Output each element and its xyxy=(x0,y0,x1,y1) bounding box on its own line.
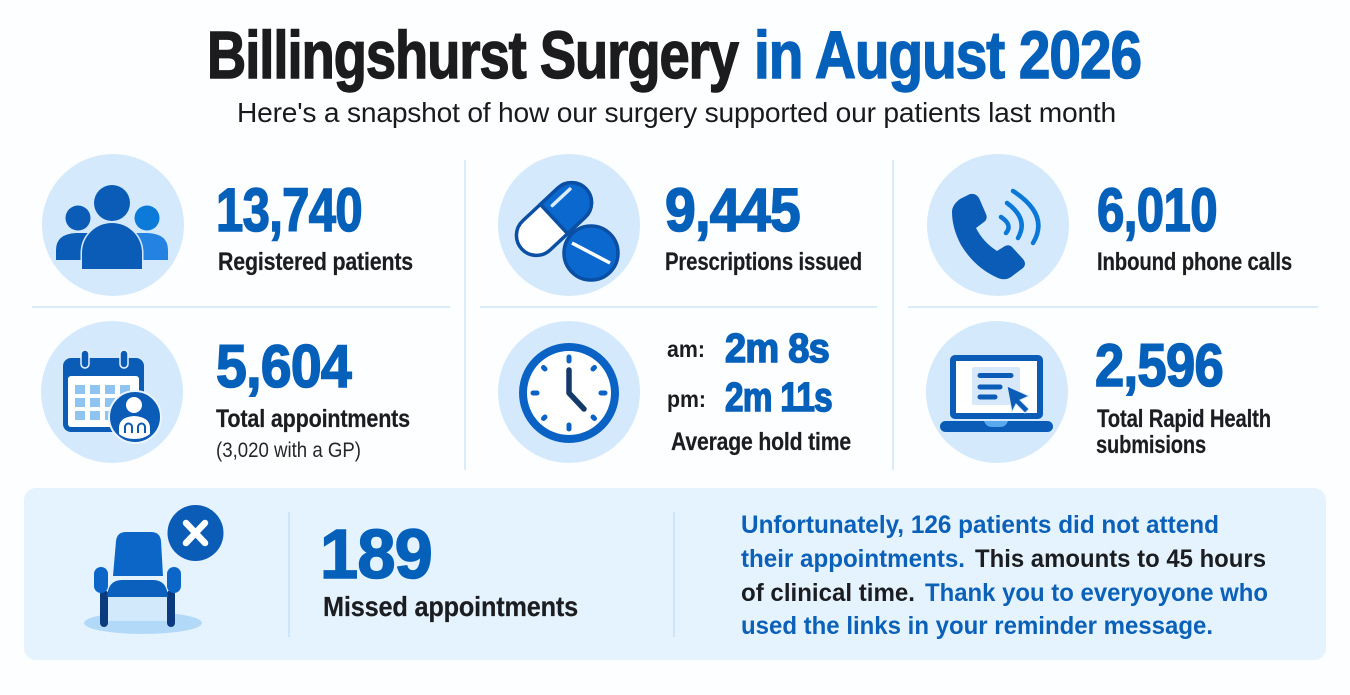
text block: attendance message: used the links in your reminder message. xyxy=(741,612,1213,640)
stat: 2,596: 2,596 xyxy=(1095,332,1223,399)
icon: clock xyxy=(498,321,640,463)
panel: prescriptions xyxy=(498,154,862,296)
text block: attendance message: their appointments. xyxy=(741,545,965,573)
label: total rapid health submisions: submisions xyxy=(1096,431,1206,459)
label: missed appointments: Missed appointments xyxy=(323,591,578,622)
icon: laptop xyxy=(926,321,1068,463)
icon: phone xyxy=(927,154,1069,296)
subtitle: Here's a snapshot of how our surgery supported our patients last month xyxy=(237,97,1116,128)
label: am: am: xyxy=(667,336,705,362)
label: inbound phone calls: Inbound phone calls xyxy=(1097,248,1292,276)
title: in August 2026 xyxy=(754,18,1141,93)
icon: calendar with doctor xyxy=(41,321,183,463)
panel: registered patients xyxy=(42,154,413,296)
panel: total appointments xyxy=(41,321,410,463)
icon: group of people xyxy=(42,154,184,296)
title: Billingshurst Surgery xyxy=(207,18,739,93)
text block: attendance message: This amounts to 45 hours xyxy=(975,545,1266,573)
label: registered patients: Registered patients xyxy=(218,248,413,276)
label: total rapid health submisions: Total Rapid Health xyxy=(1097,405,1271,433)
label: pm: pm: xyxy=(667,386,706,412)
panel: average hold time xyxy=(498,321,851,463)
stat: 9,445: 9,445 xyxy=(665,176,800,244)
text block: attendance message: of clinical time. xyxy=(741,579,915,607)
panel: missed appointments xyxy=(24,488,1326,660)
stat: 6,010: 6,010 xyxy=(1097,176,1217,244)
stat: am hold time: 2m 8s xyxy=(725,325,829,371)
label: average hold time: Average hold time xyxy=(671,428,851,456)
text block: attendance message: Unfortunately, 126 patients did not attend xyxy=(741,511,1219,539)
stat: pm hold time: 2m 11s xyxy=(725,374,832,420)
stat: 5,604: 5,604 xyxy=(216,333,352,400)
text block: attendance message xyxy=(741,511,1268,640)
panel: rapid health submissions xyxy=(926,321,1271,463)
text block: attendance message: Thank you to everyoyone who xyxy=(925,579,1268,607)
icon: empty chair with cross xyxy=(84,505,224,634)
note: GP appointments: (3,020 with a GP) xyxy=(216,439,361,462)
label: total appointments: Total appointments xyxy=(216,405,410,433)
panel: phone calls xyxy=(927,154,1292,296)
icon: pills xyxy=(498,154,640,296)
label: total rapid health submisions xyxy=(1096,405,1271,459)
stat: 189: 189 xyxy=(320,515,432,593)
stat: 13,740: 13,740 xyxy=(216,176,362,244)
label: prescriptions issued: Prescriptions issued xyxy=(665,248,862,276)
